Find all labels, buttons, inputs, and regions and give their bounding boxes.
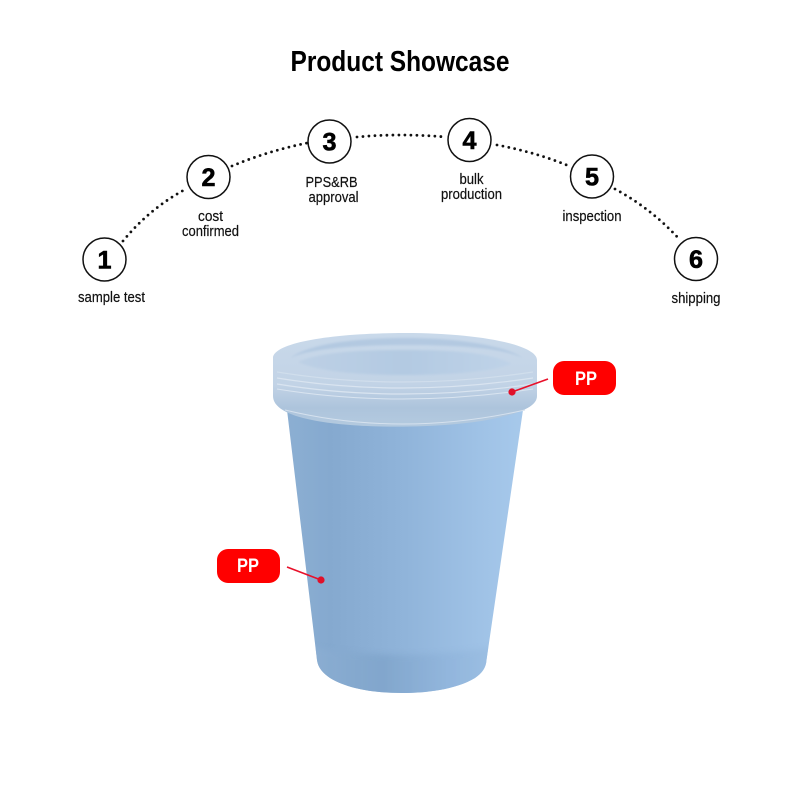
step 1: sample test: 1	[98, 246, 112, 274]
callout: PP lid	[508, 361, 616, 396]
cup body	[280, 405, 530, 700]
step 2: cost confirmed: confirmed	[182, 223, 239, 240]
callout: PP cup: PP	[237, 556, 259, 577]
step 6: shipping: 6	[689, 246, 703, 274]
step 1: sample test: sample test	[78, 289, 146, 306]
product: cup with lid	[273, 333, 537, 700]
callout: PP cup	[217, 549, 325, 584]
step 6: shipping	[672, 238, 720, 307]
step 2: cost confirmed: 2	[202, 164, 216, 192]
step 4: bulk production: bulk	[460, 171, 484, 188]
step 5: inspection: inspection	[562, 208, 622, 225]
step 3: PPS&RB approval: 3	[322, 128, 336, 156]
step 4: bulk production: production	[441, 186, 502, 203]
step 1: sample test	[78, 238, 146, 306]
dotted arc connecting process steps	[123, 135, 680, 241]
step 3: PPS&RB approval	[306, 120, 358, 206]
step 5: inspection: 5	[585, 164, 599, 192]
step 2: cost confirmed	[182, 156, 239, 240]
step 4: bulk production: 4	[462, 127, 477, 155]
step 3: PPS&RB approval: PPS&RB	[306, 174, 358, 191]
step 2: cost confirmed: cost	[198, 208, 224, 225]
title: Product Showcase	[290, 46, 510, 78]
step 5: inspection	[562, 155, 622, 225]
lid	[273, 333, 537, 427]
callout: PP lid: PP	[575, 369, 597, 390]
step 3: PPS&RB approval: approval	[308, 189, 358, 206]
step 4: bulk production	[441, 118, 502, 203]
step 6: shipping: shipping	[672, 290, 720, 307]
